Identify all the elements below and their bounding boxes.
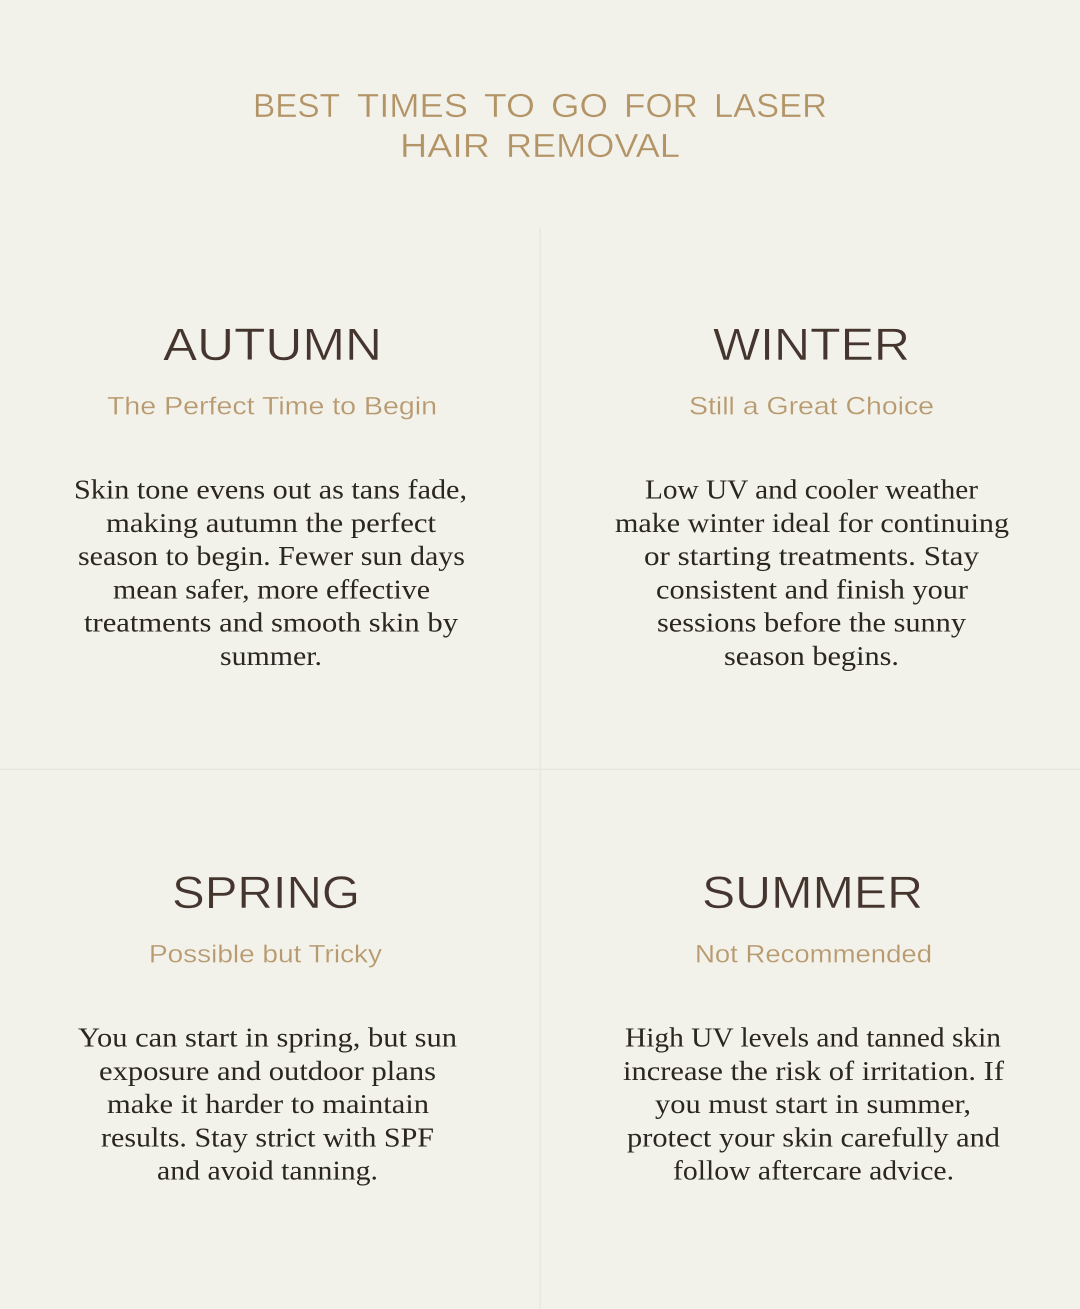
text block: winter: make winter ideal for continuing bbox=[615, 507, 1009, 538]
text block: autumn: summer. bbox=[220, 640, 322, 671]
title: LASER bbox=[714, 87, 827, 124]
subheading: summer: Not Recommended bbox=[695, 940, 932, 968]
text block: spring: make it harder to maintain bbox=[107, 1088, 429, 1119]
text block: winter: Low UV and cooler weather bbox=[645, 474, 978, 504]
text block: autumn bbox=[74, 474, 467, 671]
heading: summer: SUMMER bbox=[702, 867, 923, 918]
title: TO bbox=[484, 87, 535, 124]
text block: autumn: Skin tone evens out as tans fade, bbox=[74, 474, 467, 504]
text block: winter: sessions before the sunny bbox=[657, 607, 966, 638]
title: BEST bbox=[253, 87, 340, 124]
title: FOR bbox=[624, 87, 698, 124]
text block: winter: season begins. bbox=[724, 640, 899, 671]
subheading: autumn: The Perfect Time to Begin bbox=[107, 392, 437, 420]
panel: summer bbox=[623, 867, 1005, 1186]
text block: summer bbox=[623, 1022, 1005, 1186]
text block: summer: High UV levels and tanned skin bbox=[625, 1022, 1001, 1052]
heading: spring: SPRING bbox=[172, 867, 360, 918]
text block: winter bbox=[615, 474, 1009, 671]
text block: summer: protect your skin carefully and bbox=[627, 1121, 1000, 1152]
title: GO bbox=[551, 87, 608, 124]
text block: spring: You can start in spring, but sun bbox=[78, 1022, 457, 1052]
title: HAIR bbox=[400, 127, 490, 164]
title: REMOVAL bbox=[506, 127, 680, 164]
text block: spring: exposure and outdoor plans bbox=[99, 1055, 436, 1086]
text block: summer: follow aftercare advice. bbox=[673, 1155, 954, 1186]
text block: autumn: treatments and smooth skin by bbox=[84, 607, 458, 638]
panel: spring bbox=[78, 867, 457, 1186]
text block: autumn: season to begin. Fewer sun days bbox=[78, 540, 465, 571]
panel: winter bbox=[615, 319, 1009, 671]
text block: winter: consistent and finish your bbox=[656, 573, 968, 604]
panel: autumn bbox=[74, 319, 467, 671]
text block: autumn: making autumn the perfect bbox=[106, 507, 436, 538]
text block: spring bbox=[78, 1022, 457, 1186]
text block: winter: or starting treatments. Stay bbox=[644, 540, 979, 571]
text block: summer: you must start in summer, bbox=[655, 1088, 971, 1119]
text block: summer: increase the risk of irritation. If bbox=[623, 1055, 1005, 1086]
heading: winter: WINTER bbox=[713, 319, 910, 370]
subheading: winter: Still a Great Choice bbox=[689, 392, 934, 420]
title bbox=[253, 87, 827, 164]
text block: autumn: mean safer, more effective bbox=[113, 573, 430, 604]
heading: autumn: AUTUMN bbox=[163, 319, 382, 370]
text block: spring: results. Stay strict with SPF bbox=[101, 1121, 434, 1152]
subheading: spring: Possible but Tricky bbox=[149, 940, 383, 968]
title: TIMES bbox=[357, 87, 468, 124]
text block: spring: and avoid tanning. bbox=[157, 1155, 378, 1186]
